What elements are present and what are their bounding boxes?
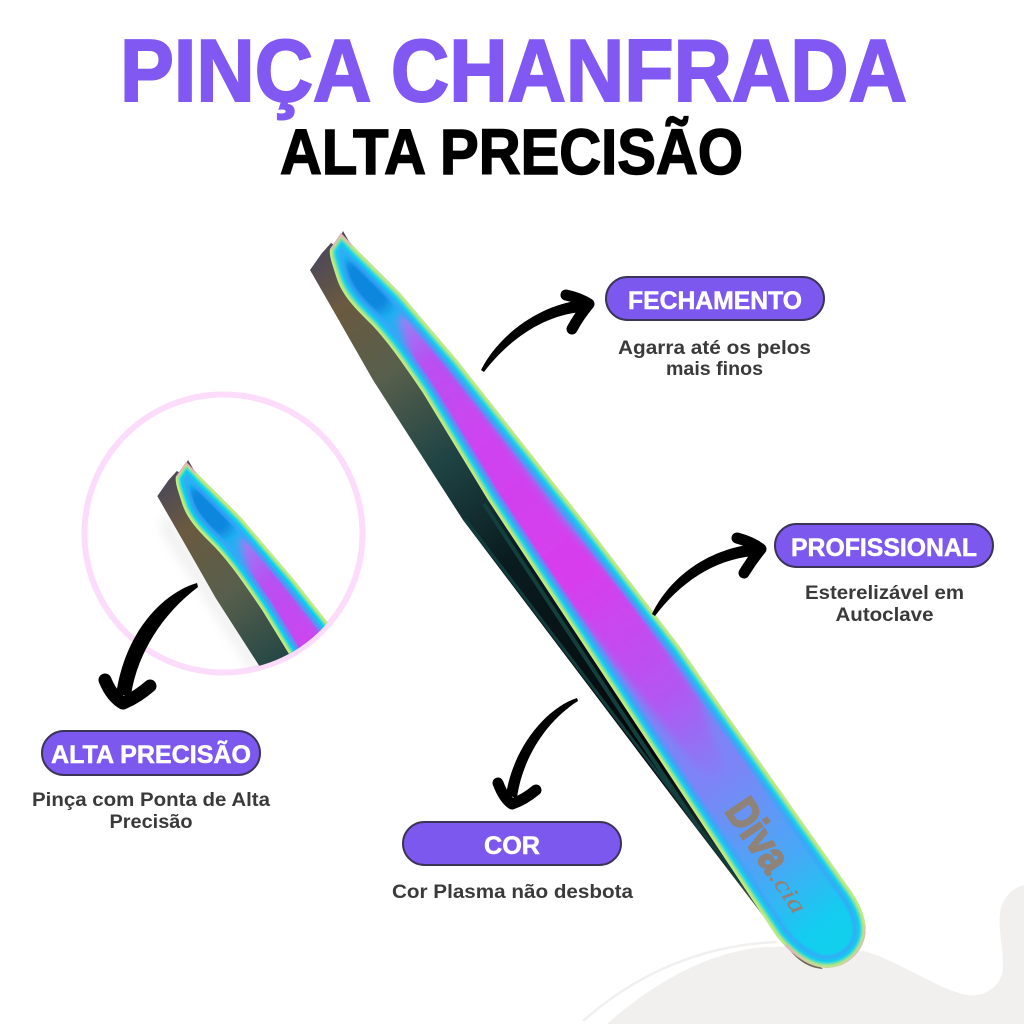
background blob	[583, 885, 1024, 1024]
label: fechamento: mais finos	[666, 359, 763, 380]
arrow: profissional	[652, 538, 761, 616]
logo on tweezer: Diva	[716, 789, 800, 882]
label: alta precisao	[32, 731, 270, 833]
label: alta precisao: Precisão	[110, 812, 192, 833]
label: profissional: PROFISSIONAL	[791, 534, 977, 562]
title: PINÇA CHANFRADA	[120, 21, 907, 120]
logo on tweezer	[716, 789, 827, 921]
subtitle: ALTA PRECISÃO	[280, 116, 743, 188]
main tweezer	[310, 225, 875, 975]
label: fechamento: Agarra até os pelos	[618, 338, 811, 359]
label: alta precisao: Pinça com Ponta de Alta	[32, 790, 270, 811]
label: cor	[392, 822, 633, 903]
label: cor: COR	[484, 832, 540, 860]
label: fechamento: FECHAMENTO	[628, 287, 802, 315]
arrow: cor	[498, 698, 578, 804]
label: profissional: Autoclave	[836, 605, 934, 626]
arrow: alta precisao	[105, 583, 198, 703]
zoom circle with tweezer tip	[82, 392, 366, 676]
arrow: fechamento	[481, 295, 589, 372]
label: fechamento	[606, 277, 824, 380]
label: cor: Cor Plasma não desbota	[392, 882, 633, 903]
label: profissional	[775, 524, 993, 626]
label: alta precisao: ALTA PRECISÃO	[51, 739, 251, 769]
label: profissional: Esterelizável em	[805, 583, 964, 604]
logo on tweezer: .cia	[764, 866, 811, 919]
